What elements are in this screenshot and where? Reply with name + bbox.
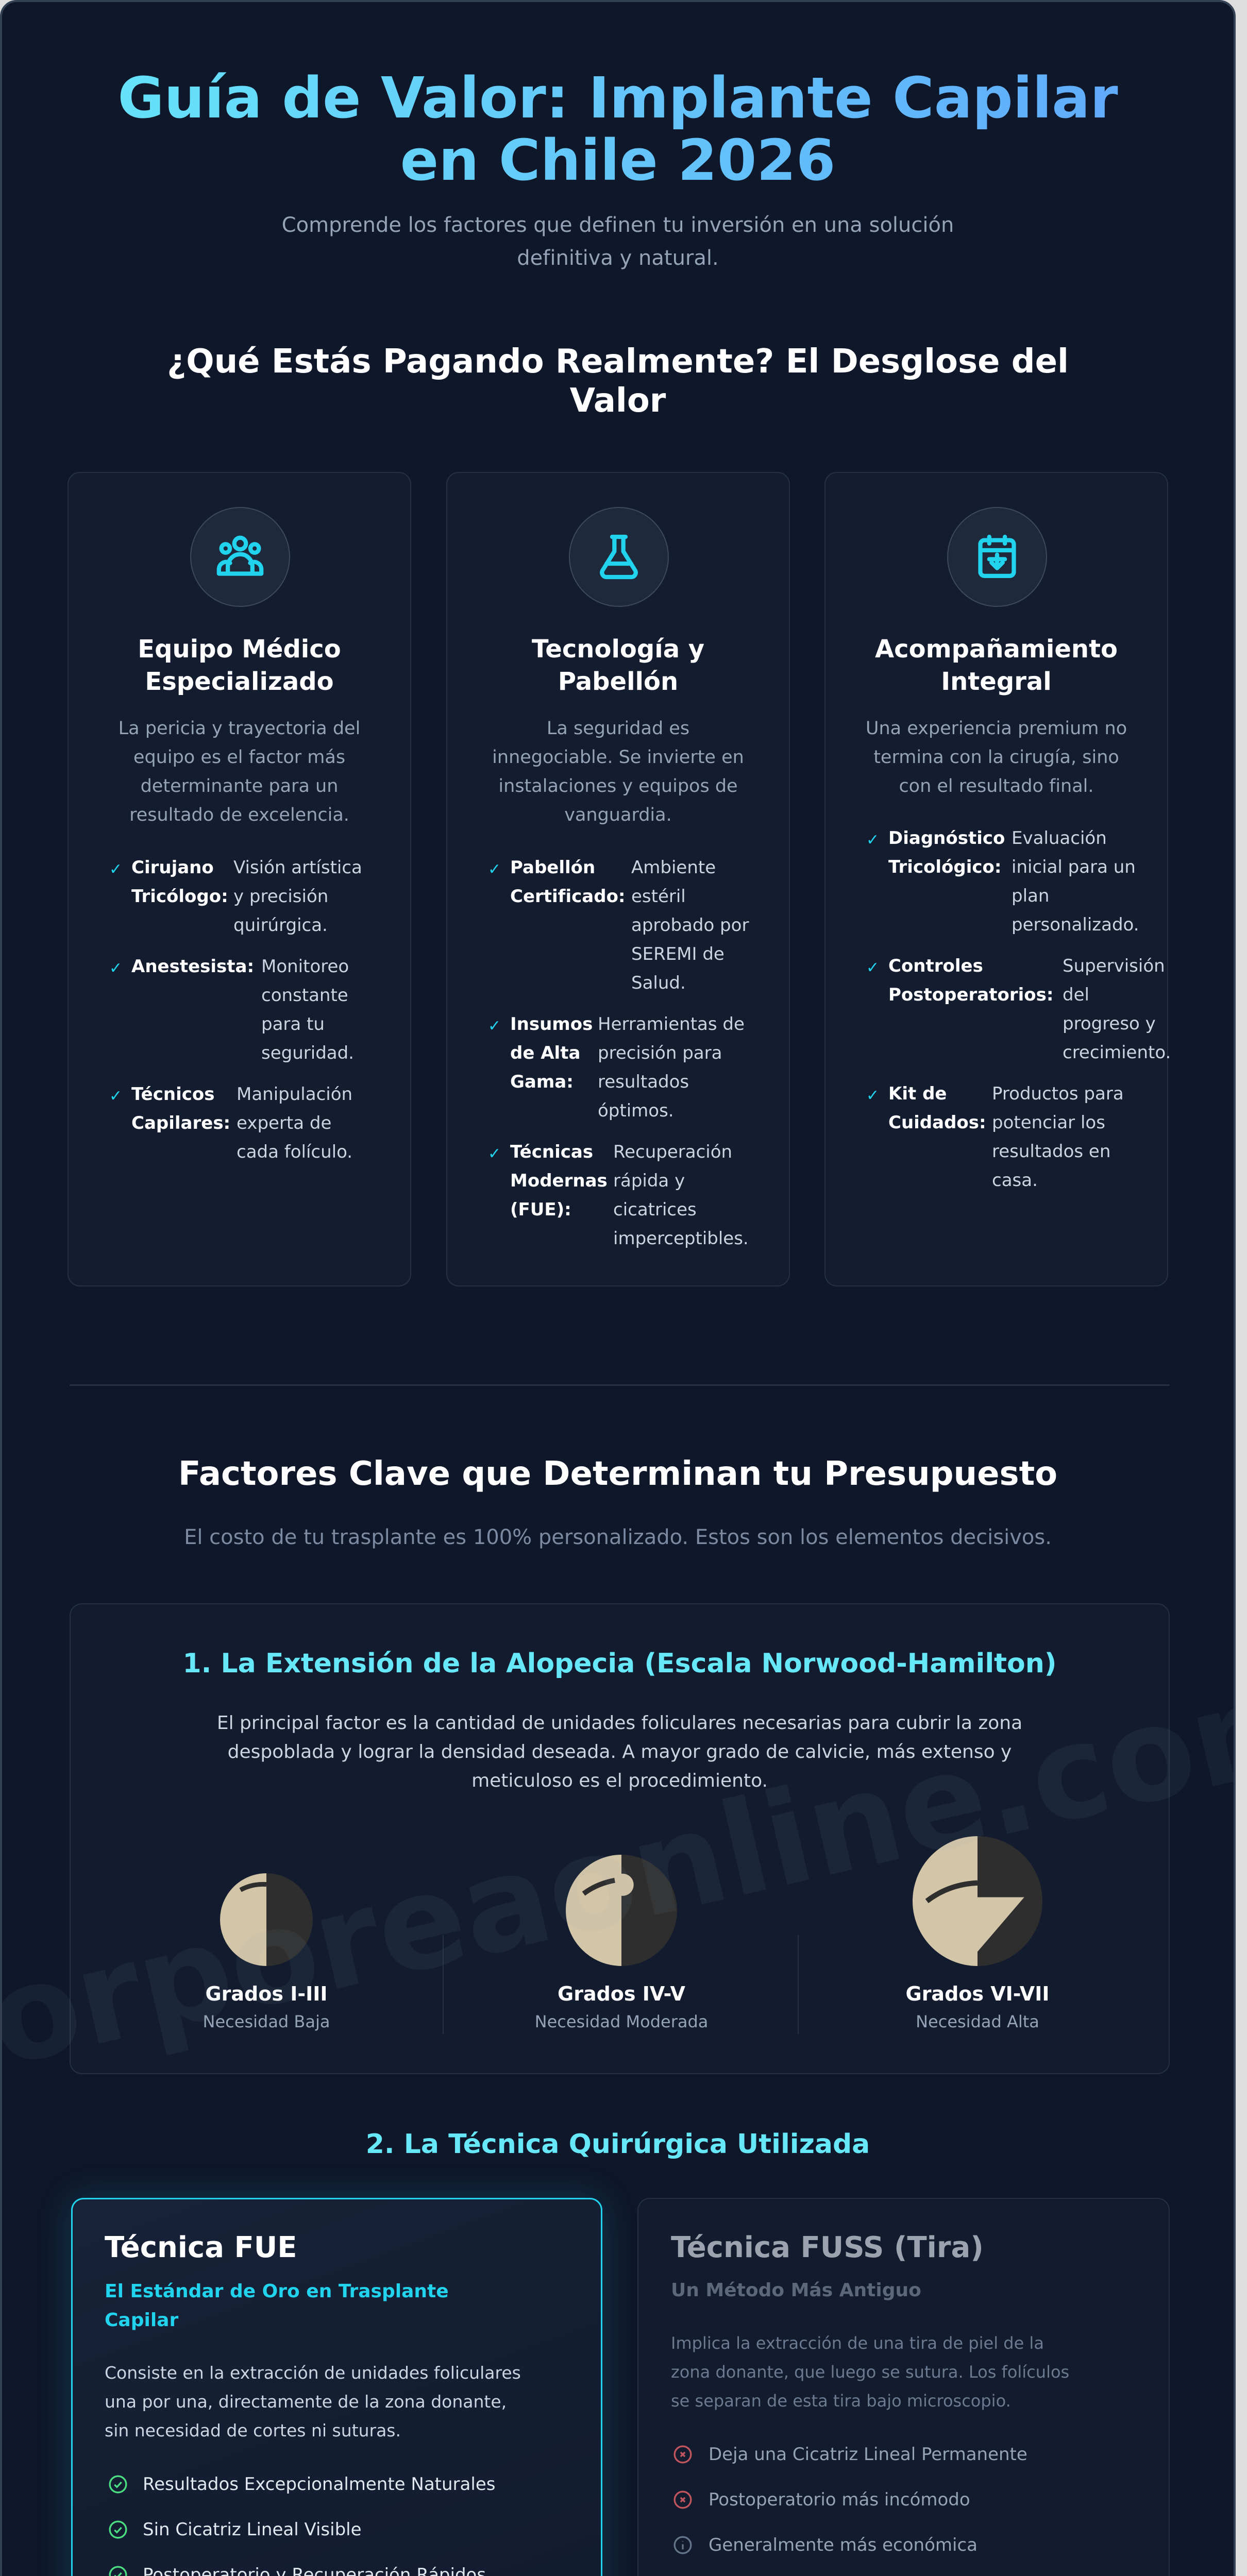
subtitle <box>282 213 954 270</box>
label: grade VI-VII: Necesidad Alta <box>916 2012 1039 2031</box>
panel: equipo médico <box>68 472 411 1286</box>
list: Insumos de Alta Gama: <box>510 1014 593 1092</box>
title: Guía de Valor: Implante Capilar <box>117 65 1118 131</box>
title <box>2 67 1234 192</box>
list: Técnicos Capilares: <box>131 1084 230 1133</box>
FUSS drawbacks list: Generalmente más económica <box>709 2535 978 2555</box>
heading: value breakdown <box>167 343 1069 420</box>
list: Supervisión del progreso y crecimiento. <box>1063 956 1171 1063</box>
panel: tecnología <box>446 472 790 1286</box>
label: grade I-III <box>203 1982 330 2031</box>
card description: La pericia y trayectoria del <box>119 718 360 739</box>
FUE title: Técnica FUE <box>105 2231 297 2264</box>
list: Monitoreo constante para tu seguridad. <box>261 956 354 1063</box>
list <box>488 857 749 1249</box>
list: ✓ <box>488 1017 501 1035</box>
list: ✓ <box>866 959 879 977</box>
panel: acompañamiento <box>824 472 1168 1286</box>
icon: head grade IV-V <box>566 1855 677 1966</box>
list: Ambiente estéril aprobado por SEREMI de Salud. <box>631 857 749 993</box>
list: ✓ <box>488 1145 501 1163</box>
FUSS drawbacks list <box>674 2444 1027 2555</box>
FUSS description: zona donante, que luego se sutura. Los folículos <box>671 2362 1069 2382</box>
panel: FUSS technique <box>637 2198 1170 2576</box>
FUE description <box>105 2363 521 2441</box>
card title: Acompañamiento <box>875 635 1118 664</box>
FUE description: sin necesidad de cortes ni suturas. <box>105 2420 401 2441</box>
list: ✓ <box>866 1087 879 1105</box>
list: Técnicas Modernas (FUE): <box>510 1142 608 1220</box>
panel text: meticuloso es el procedimiento. <box>471 1770 768 1791</box>
list: ✓ <box>109 959 122 977</box>
card title: Especializado <box>145 667 334 696</box>
list: ✓ <box>866 831 879 849</box>
card description: con el resultado final. <box>899 776 1094 796</box>
panel: alopecia extension <box>70 1603 1170 2074</box>
FUE benefits list: Resultados Excepcionalmente Naturales <box>143 2474 495 2495</box>
FUSS description: se separan de esta tira bajo microscopio. <box>671 2391 1011 2411</box>
heading: surgical technique: 2. La Técnica Quirúrgica Utilizada <box>366 2129 870 2160</box>
card description: equipo es el factor más <box>133 747 345 768</box>
FUE description: Consiste en la extracción de unidades foliculares <box>105 2363 521 2383</box>
list: Recuperación rápida y cicatrices imperceptibles. <box>613 1142 749 1249</box>
list: Manipulación experta de cada folículo. <box>237 1084 352 1162</box>
FUSS description <box>671 2333 1069 2411</box>
list: Cirujano Tricólogo: <box>131 857 228 907</box>
card description <box>866 718 1127 796</box>
card description: determinante para un <box>141 776 338 796</box>
FUE subtitle: El Estándar de Oro en Trasplante <box>105 2281 449 2302</box>
panel heading: 1. La Extensión de la Alopecia (Escala Norwood-Hamilton) <box>182 1648 1057 1679</box>
panel text <box>217 1713 1022 1791</box>
FUE benefits list: Sin Cicatriz Lineal Visible <box>143 2519 362 2540</box>
icon: head grade I-III <box>220 1873 313 1966</box>
subtitle: Comprende los factores que definen tu inversión en una solución <box>282 213 954 237</box>
panel: FUE technique <box>71 2198 602 2576</box>
list: Visión artística y precisión quirúrgica. <box>233 857 362 936</box>
FUE subtitle <box>105 2281 449 2331</box>
list <box>866 828 1171 1191</box>
list: ✓ <box>488 860 501 878</box>
subtitle: key factors: El costo de tu trasplante es 100% personalizado. Estos son los elementos decisivos. <box>184 1526 1052 1549</box>
list: Herramientas de precisión para resultados óptimos. <box>598 1014 745 1121</box>
label: grade VI-VII <box>906 1982 1049 2031</box>
list: Controles Postoperatorios: <box>888 956 1053 1005</box>
panel text: despoblada y lograr la densidad deseada. A mayor grado de calvicie, más extenso y <box>228 1741 1012 1762</box>
list: ✓ <box>109 1087 122 1105</box>
icon: people group <box>190 507 290 607</box>
label: grade IV-V <box>535 1982 708 2031</box>
FUE description: una por una, directamente de la zona donante, <box>105 2392 507 2412</box>
FUSS drawbacks list: Deja una Cicatriz Lineal Permanente <box>709 2444 1027 2465</box>
card title: Integral <box>941 667 1052 696</box>
list: Evaluación inicial para un plan personalizado. <box>1012 828 1139 935</box>
card description: termina con la cirugía, sino <box>873 747 1119 768</box>
icon: flask <box>569 507 669 607</box>
card description: La seguridad es <box>547 718 689 739</box>
card description: innegociable. Se invierte en <box>492 747 744 768</box>
card title <box>532 635 704 696</box>
card description: instalaciones y equipos de <box>498 776 738 796</box>
icon: head grade VI-VII <box>913 1836 1042 1966</box>
card description: Una experiencia premium no <box>866 718 1127 739</box>
card title <box>138 635 341 696</box>
list: Productos para potenciar los resultados en casa. <box>992 1083 1124 1191</box>
FUSS description: Implica la extracción de una tira de piel de la <box>671 2333 1044 2353</box>
FUSS title: Técnica FUSS (Tira) <box>671 2231 984 2264</box>
FUE benefits list <box>109 2474 495 2576</box>
card title <box>875 635 1118 696</box>
list: ✓ <box>109 860 122 878</box>
heading: key factors: Factores Clave que Determinan tu Presupuesto <box>178 1455 1057 1493</box>
card title: Tecnología y <box>532 635 704 664</box>
card description <box>492 718 744 825</box>
card description: vanguardia. <box>564 805 672 825</box>
card description <box>119 718 360 825</box>
title: en Chile 2026 <box>400 127 835 193</box>
card title: Equipo Médico <box>138 635 341 664</box>
subtitle: definitiva y natural. <box>517 246 719 270</box>
list <box>109 857 362 1162</box>
icon: calendar <box>947 507 1047 607</box>
panel text: El principal factor es la cantidad de unidades foliculares necesarias para cubrir la zona <box>217 1713 1022 1734</box>
FUSS subtitle: Un Método Más Antiguo <box>671 2280 921 2301</box>
list: Pabellón Certificado: <box>510 857 626 907</box>
label: grade I-III: Grados I-III <box>205 1982 328 2005</box>
list: Kit de Cuidados: <box>888 1083 986 1133</box>
FUSS drawbacks list: Postoperatorio más incómodo <box>709 2489 970 2510</box>
heading: value breakdown: ¿Qué Estás Pagando Realmente? El Desglose del <box>167 343 1069 381</box>
list: Diagnóstico Tricológico: <box>888 828 1005 877</box>
heading: value breakdown: Valor <box>570 382 666 420</box>
label: grade IV-V: Necesidad Moderada <box>535 2012 708 2031</box>
label: grade VI-VII: Grados VI-VII <box>906 1982 1049 2005</box>
FUE subtitle: Capilar <box>105 2310 178 2331</box>
list: Anestesista: <box>131 956 254 977</box>
label: grade IV-V: Grados IV-V <box>558 1982 685 2005</box>
label: grade I-III: Necesidad Baja <box>203 2012 330 2031</box>
card description: resultado de excelencia. <box>129 805 349 825</box>
card title: Pabellón <box>558 667 678 696</box>
